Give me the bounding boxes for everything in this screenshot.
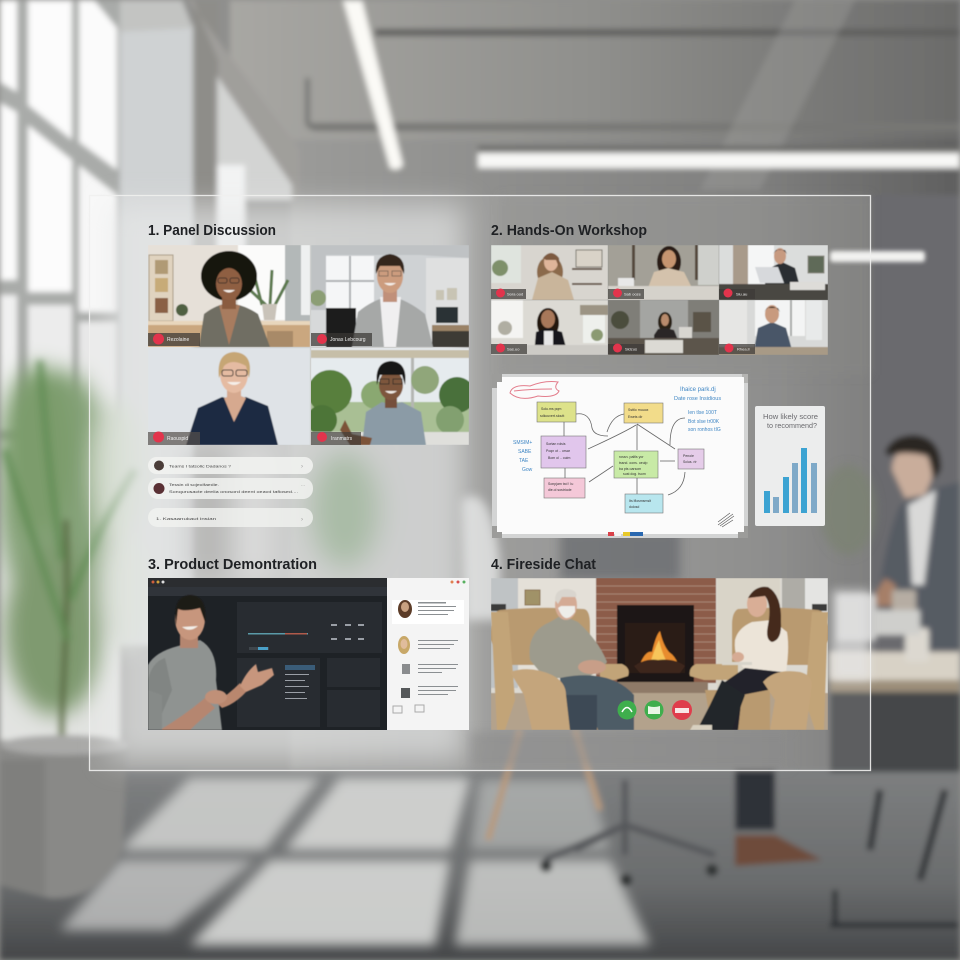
left armchair back bbox=[491, 608, 590, 665]
note text: rossn. paltls yor bbox=[619, 455, 644, 459]
blue handwriting bbox=[513, 387, 721, 473]
chart strip bbox=[248, 633, 308, 634]
note text: tssnd. oons. oeulp bbox=[619, 461, 647, 465]
note text: dolosd bbox=[629, 505, 639, 509]
heading 4: 4. Fireside Chat bbox=[491, 556, 596, 573]
heading 1: 1. Panel Discussion bbox=[148, 222, 276, 239]
chat message 2 bbox=[148, 478, 313, 499]
chat message 1: › bbox=[301, 464, 303, 470]
ceiling lights bbox=[343, 0, 960, 169]
name tag: Jonas Lebcourg bbox=[330, 337, 366, 343]
floor light patches bbox=[60, 778, 650, 945]
video tile: woman in black blazer bbox=[491, 300, 608, 355]
note text: Sonpjam txd ! Iu bbox=[548, 482, 573, 486]
chat message 3: 1. Kasaanukaut insian bbox=[156, 516, 216, 521]
note text: Solu.ms pqm bbox=[541, 407, 562, 411]
back wall bbox=[290, 140, 960, 780]
panel tint: left half bbox=[110, 205, 465, 760]
dark dashboard bbox=[148, 578, 387, 730]
video tile: blonde woman in navy bbox=[148, 348, 310, 445]
lamp through glass bbox=[830, 251, 925, 262]
name tag bbox=[311, 432, 361, 445]
note text: Bom ol .. ouim bbox=[548, 456, 570, 460]
video tile: man in grey blazer bbox=[311, 245, 469, 347]
name tag: Sidzus bbox=[625, 346, 637, 352]
floor bbox=[491, 693, 828, 730]
name tag bbox=[148, 432, 200, 445]
poll card: How likely score bbox=[763, 414, 818, 421]
video tile: man at desk bbox=[719, 245, 828, 300]
left armchair arm and seat bbox=[600, 664, 629, 680]
man bbox=[529, 615, 607, 678]
name tag: Rezolaine bbox=[167, 337, 189, 343]
ceiling bbox=[230, 0, 960, 200]
hatch mark bbox=[718, 513, 734, 527]
left wall bbox=[118, 25, 193, 645]
ceiling beams bbox=[305, 0, 960, 190]
name tag bbox=[311, 333, 372, 346]
fire bbox=[640, 631, 678, 664]
panel 1: Panel Discussion bbox=[148, 222, 475, 527]
name tag: Sab ooze bbox=[624, 292, 642, 296]
flow arrows bbox=[564, 414, 685, 495]
fireside scene bbox=[491, 578, 828, 730]
note text: Ewets dir bbox=[628, 415, 643, 419]
chat message 2: Tessin di sojeolfaedie. bbox=[169, 482, 219, 487]
left armchair front arm bbox=[510, 669, 570, 730]
name tag: Sas.uo bbox=[507, 346, 520, 352]
heading 2: 2. Hands-On Workshop bbox=[491, 222, 647, 239]
video tile: woman with laptop bbox=[608, 245, 719, 300]
note text bbox=[540, 407, 697, 509]
name tag bbox=[148, 333, 200, 346]
blue handwriting: SABE bbox=[518, 449, 532, 455]
right armchair front arm bbox=[763, 671, 812, 730]
whiteboard bbox=[492, 374, 748, 538]
presenter bbox=[148, 595, 274, 730]
plant pot bbox=[0, 735, 128, 898]
chat message 2: ⋯ bbox=[301, 483, 305, 488]
chat message 3 bbox=[148, 508, 313, 527]
panel 2: Hands-On Workshop bbox=[491, 222, 828, 538]
note text: sust dog. tsom bbox=[623, 472, 646, 476]
panel 4: Fireside Chat bbox=[491, 556, 828, 730]
note text: Its lflosmsmslt bbox=[629, 499, 651, 503]
blue handwriting: SMSIM+ bbox=[513, 440, 532, 446]
wall recess bbox=[217, 76, 292, 200]
blurred person right bbox=[871, 195, 960, 655]
note text: Penoie bbox=[683, 454, 694, 458]
name tag: Rhea.il bbox=[737, 346, 750, 352]
floor bbox=[0, 770, 960, 960]
marker tray bbox=[608, 532, 643, 536]
chat message 2: Sonqurusacte deelia onosord deent oeavd tafiosed.... bbox=[169, 489, 298, 494]
note text: sdkcuvert.sloutt bbox=[540, 414, 564, 418]
note text: die.ol sostriode bbox=[548, 488, 572, 492]
table and cups bbox=[830, 590, 960, 772]
sticky notes bbox=[537, 402, 704, 513]
heading 3: 3. Product Demontration bbox=[148, 556, 317, 573]
video tile: woman in dim office bbox=[608, 300, 719, 355]
chat message 3: › bbox=[301, 517, 303, 523]
poll card bbox=[755, 406, 825, 526]
blue handwriting: Gow bbox=[522, 467, 533, 473]
room walls bbox=[491, 578, 828, 730]
brick chimney bbox=[596, 578, 716, 683]
chat message 1: Teams I tatsolic Dadanos ? bbox=[169, 464, 232, 468]
glass panel bbox=[90, 195, 925, 770]
bar chart bbox=[764, 448, 817, 513]
blue handwriting: Ien tlse 100T bbox=[688, 410, 717, 416]
blue handwriting: Bot slse tr00K bbox=[688, 419, 720, 425]
video tile: man by garden window bbox=[311, 348, 469, 445]
blue handwriting: TAE bbox=[519, 458, 529, 464]
name tag: Iranmatrs bbox=[331, 436, 353, 442]
panel 3: Product Demonstration bbox=[148, 556, 469, 730]
right armchair back bbox=[732, 608, 828, 665]
note text: ba pts oarsom bbox=[619, 467, 641, 471]
video tile: woman at shelf bbox=[491, 245, 608, 300]
chair and legs bbox=[488, 730, 958, 925]
name tag: Siu.au bbox=[736, 292, 747, 296]
blue handwriting: Date rose Insidious bbox=[674, 396, 721, 402]
red scribble bbox=[510, 382, 559, 398]
woman bbox=[735, 620, 788, 678]
name tag: Sora ood bbox=[507, 292, 523, 296]
white reviews sidebar bbox=[387, 578, 469, 730]
plant bbox=[0, 365, 149, 715]
note text: Poqn ot .. orsar bbox=[546, 449, 571, 453]
note text: Scius. rir bbox=[683, 460, 697, 464]
chat message 1 bbox=[148, 457, 313, 474]
note text: Ssttlo rnuuox bbox=[628, 408, 649, 412]
note text: Sortan rolsis bbox=[546, 442, 566, 446]
poll card: to recommend? bbox=[767, 423, 817, 430]
name tag: Raouspid bbox=[167, 436, 188, 442]
blue handwriting: son ronhos tIG bbox=[688, 427, 721, 433]
video tile: man in blue shirt bbox=[719, 300, 828, 355]
blue handwriting: Ihaice park.dj bbox=[680, 387, 716, 393]
call buttons bbox=[618, 700, 636, 720]
window frames bbox=[0, 0, 120, 740]
dashboard panels bbox=[237, 602, 382, 727]
video tile: woman with curly hair bbox=[148, 245, 310, 347]
